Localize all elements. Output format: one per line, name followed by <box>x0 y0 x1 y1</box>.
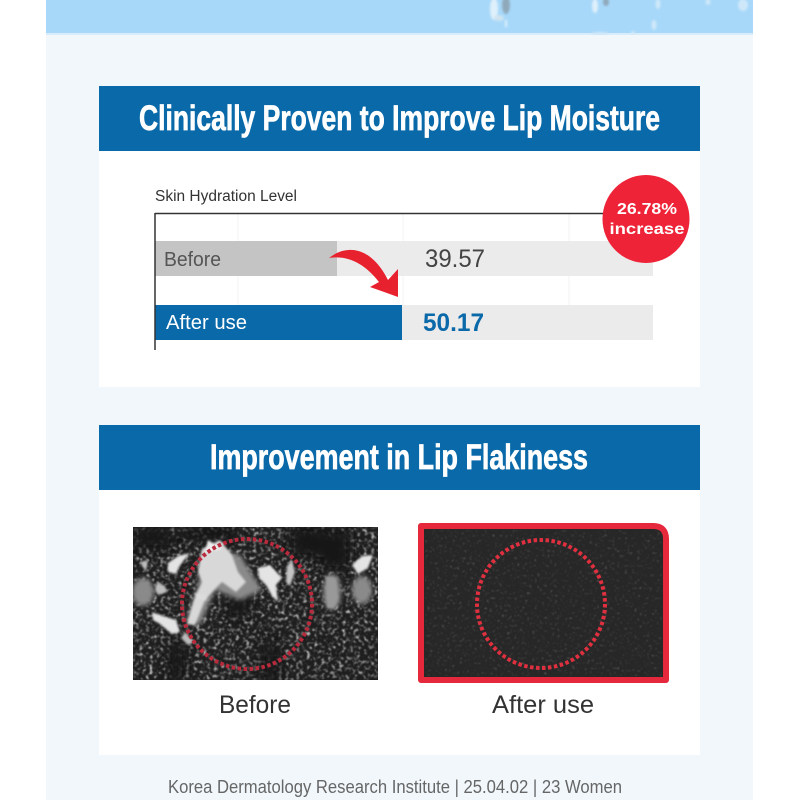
chart title: Skin Hydration Level <box>155 188 297 205</box>
heading: flakiness: Improvement in Lip Flakiness <box>210 438 588 477</box>
top sky band with water drops <box>46 0 753 36</box>
value: after use: 50.17 <box>423 309 484 337</box>
bar chart: skin hydration <box>155 213 653 350</box>
label: after use: After use <box>166 312 247 334</box>
footer source: Korea Dermatology Research Institute | 25.04.02 | 23 Women <box>168 777 622 797</box>
label: before: Before <box>164 249 221 271</box>
arrow: before to after <box>329 250 398 297</box>
caption: after use: After use <box>492 691 594 719</box>
callout: increase <box>602 175 690 263</box>
circle: before <box>182 539 312 669</box>
circle: after use <box>477 540 605 668</box>
callout: increase: 26.78% <box>617 201 677 218</box>
caption: before: Before <box>219 691 291 719</box>
panel: lip flakiness <box>99 425 700 755</box>
heading bar: flakiness <box>99 425 700 490</box>
flakes: soft grey haze <box>132 548 372 625</box>
callout: increase: increase <box>610 221 685 238</box>
photo: before <box>132 527 378 685</box>
heading bar: moisture <box>99 86 700 151</box>
panel: lip moisture <box>99 86 700 387</box>
value: before: 39.57 <box>425 245 485 273</box>
photo: after use <box>421 526 666 680</box>
